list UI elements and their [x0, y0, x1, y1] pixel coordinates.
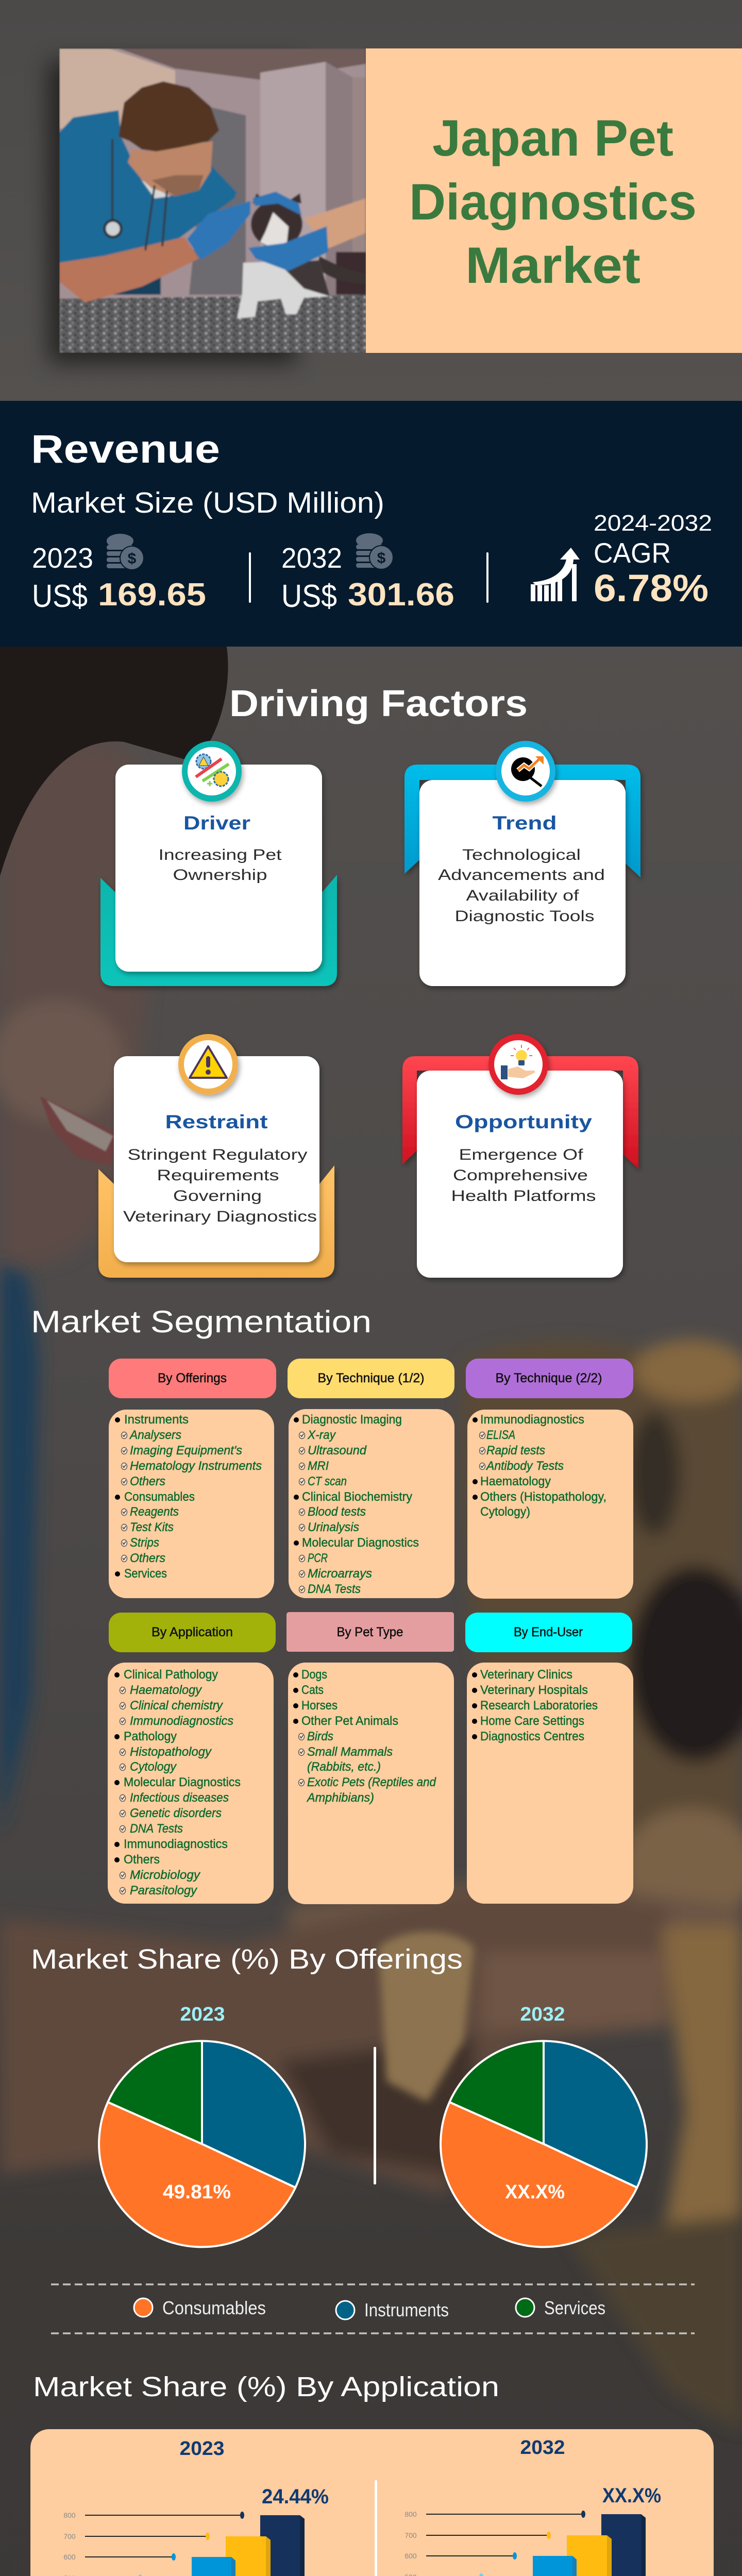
list: Infectious diseases [130, 1791, 229, 1805]
bar chart 2032 [404, 2437, 661, 2576]
2023 value: 169.65 [98, 577, 206, 613]
market size subtitle: Market Size (USD Million) [31, 486, 384, 519]
list: Immunodiagnostics [130, 1714, 233, 1728]
2032 value [281, 542, 454, 614]
icon: trend medallion [496, 741, 555, 802]
opportunity text: Comprehensive [453, 1167, 588, 1184]
list: Diagnostic Imaging [302, 1413, 402, 1427]
list [467, 1410, 633, 1599]
list: Genetic disorders [130, 1806, 222, 1820]
panel: trend [404, 741, 640, 986]
heading: market share by application: Market Share (%) By Application [33, 2371, 499, 2402]
list: Others [130, 1475, 165, 1488]
list: MRI [308, 1459, 329, 1473]
list: Immunodiagnostics [124, 1837, 228, 1851]
list: Clinical Biochemistry [302, 1490, 412, 1504]
bar chart 2023: 700 [63, 2532, 76, 2540]
header: By End-User [514, 1625, 583, 1639]
restraint text [123, 1146, 317, 1225]
list: Imaging Equipment's [130, 1444, 242, 1458]
header: By Technique (1/2) [317, 1371, 425, 1385]
opportunity text: Emergence Of [459, 1146, 583, 1163]
list: Rapid tests [486, 1444, 545, 1458]
opportunity text [451, 1146, 596, 1205]
title panel: Diagnostics [409, 173, 697, 230]
CAGR: 2024-2032 [594, 511, 712, 536]
2023 value: 2023 [32, 542, 93, 574]
divider [375, 2480, 377, 2576]
orange ribbon [98, 1165, 334, 1278]
pie chart 2023: 49.81% [163, 2181, 231, 2203]
list: Veterinary Clinics [480, 1668, 572, 1682]
list: Microbiology [130, 1868, 201, 1882]
panel: by technique 2 [466, 1359, 633, 1599]
icon: coins 2032 [356, 533, 393, 569]
pie chart 2023 [99, 2004, 305, 2247]
list: Diagnostics Centres [480, 1730, 584, 1743]
legend: offerings: Services [544, 2297, 605, 2318]
list: (Rabbits, etc.) [307, 1760, 381, 1774]
bar chart 2032: XX.X% [602, 2484, 661, 2507]
panel: driver [100, 741, 337, 986]
header [288, 1359, 454, 1398]
icon: coins 2023 [107, 534, 144, 570]
list: DNA Tests [308, 1582, 361, 1596]
panel: by technique 1 [288, 1359, 454, 1598]
header [109, 1613, 276, 1652]
list: Hematology Instruments [130, 1459, 262, 1473]
header [286, 1612, 454, 1652]
header: By Offerings [158, 1371, 227, 1385]
list: Horses [301, 1699, 338, 1713]
list [467, 1663, 633, 1904]
divider [374, 2047, 376, 2184]
bar chart 2023: 2023 [179, 2438, 225, 2460]
list: Amphibians) [306, 1791, 374, 1805]
list: Exotic Pets (Reptiles and [307, 1775, 436, 1789]
divider [486, 552, 488, 603]
list: Antibody Tests [485, 1459, 564, 1473]
opportunity text: Health Platforms [451, 1188, 596, 1205]
icon: coins 2023: $ [128, 550, 137, 567]
panel: opportunity [402, 1034, 638, 1278]
2023 value: US$ [32, 579, 88, 614]
list: Molecular Diagnostics [302, 1536, 419, 1550]
list: Cytology) [480, 1505, 530, 1519]
icon: opportunity medallion [488, 1034, 548, 1095]
icon: coins 2032: $ [377, 550, 386, 567]
heading: market segmentation: Market Segmentation [31, 1304, 372, 1339]
list: Strips [130, 1536, 159, 1550]
list: Birds [307, 1730, 333, 1743]
bar chart 2032: 700 [404, 2531, 417, 2539]
list: Others [130, 1551, 165, 1565]
bar chart 2023: 800 [63, 2511, 76, 2519]
trend title: Trend [493, 812, 556, 834]
list [288, 1663, 454, 1904]
header [109, 1359, 276, 1398]
restraint text: Veterinary Diagnostics [123, 1208, 317, 1225]
restraint text: Governing [173, 1188, 262, 1205]
list: Haematology [130, 1683, 203, 1697]
bar chart 2032: 800 [404, 2510, 417, 2518]
driver text: Ownership [173, 867, 267, 884]
opportunity title: Opportunity [455, 1111, 593, 1132]
list: Research Laboratories [480, 1699, 598, 1713]
list: X-ray [307, 1428, 336, 1442]
driver text [159, 846, 282, 884]
panel: by end-user [465, 1613, 633, 1904]
teal ribbon [100, 875, 337, 986]
list: Consumables [124, 1490, 195, 1504]
list: Others [124, 1853, 160, 1867]
icon: driver medallion [182, 741, 242, 802]
trend text: Availability of [466, 887, 579, 904]
CAGR: 6.78% [594, 567, 709, 609]
list: Services [124, 1567, 167, 1581]
panel: restraint [98, 1034, 334, 1278]
heading: driving factors: Driving Factors [229, 683, 528, 724]
list: Haematology [480, 1475, 551, 1488]
list [108, 1663, 274, 1904]
restraint text: Stringent Regulatory [128, 1146, 307, 1163]
pie chart 2032 [441, 2004, 647, 2247]
2032 value: 2032 [281, 542, 342, 574]
bar chart 2023 [63, 2438, 329, 2576]
header: By Technique (2/2) [496, 1371, 602, 1385]
list: Pathology [124, 1730, 177, 1743]
driver title: Driver [183, 812, 250, 834]
header [465, 1613, 632, 1652]
list [109, 1410, 274, 1598]
list: Blood tests [308, 1505, 366, 1519]
header: By Application [151, 1625, 233, 1639]
trend text: Advancements and [438, 867, 605, 884]
list: Clinical chemistry [130, 1699, 224, 1713]
bar chart 2032: 600 [404, 2552, 417, 2560]
pie chart 2023: 2023 [180, 2004, 225, 2025]
header photo: vet examining cat [49, 48, 366, 363]
icon: growth arrow [531, 548, 580, 601]
list: Parasitology [130, 1884, 198, 1897]
list: Urinalysis [308, 1520, 359, 1534]
list: DNA Tests [130, 1822, 183, 1836]
2032 value: 301.66 [348, 577, 454, 613]
divider [249, 552, 251, 603]
list: Veterinary Hospitals [480, 1683, 588, 1697]
header: By Pet Type [337, 1625, 403, 1639]
trend text: Diagnostic Tools [454, 908, 595, 925]
legend: offerings: Consumables [162, 2297, 266, 2318]
title panel: Japan Pet [432, 109, 673, 166]
list: Other Pet Animals [301, 1714, 398, 1728]
list: Others (Histopathology, [480, 1490, 606, 1504]
panel: by application [108, 1613, 276, 1904]
list: Reagents [130, 1505, 179, 1519]
list: Instruments [124, 1413, 189, 1427]
list: ELISA [486, 1428, 515, 1442]
2023 value [32, 542, 206, 614]
list: Immunodiagnostics [480, 1413, 584, 1427]
trend text [438, 846, 605, 925]
blue ribbon [404, 765, 640, 877]
list: Analysers [129, 1428, 181, 1442]
2032 value: US$ [281, 579, 337, 614]
header [466, 1359, 633, 1398]
list: Clinical Pathology [124, 1668, 218, 1682]
bar chart 2023: 600 [63, 2553, 76, 2561]
title panel: Market [465, 236, 640, 294]
list [289, 1409, 454, 1598]
list: Small Mammals [307, 1745, 393, 1759]
CAGR [594, 511, 712, 609]
trend text: Technological [462, 846, 581, 863]
title panel [366, 48, 742, 353]
heading: market share by offerings: Market Share (%) By Offerings [31, 1944, 463, 1975]
list: Test Kits [130, 1520, 174, 1534]
list: CT scan [308, 1475, 347, 1488]
list: Ultrasound [308, 1444, 367, 1458]
list: Home Care Settings [480, 1714, 584, 1728]
restraint text: Requirements [157, 1167, 279, 1184]
legend: offerings: Instruments [364, 2299, 449, 2320]
legend: offerings [134, 2297, 605, 2320]
list: Cats [301, 1683, 324, 1697]
list: PCR [308, 1551, 328, 1565]
icon: restraint medallion [178, 1034, 238, 1095]
pie chart 2032: 2032 [520, 2004, 565, 2025]
panel: revenue band [0, 401, 742, 647]
pie chart 2032: XX.X% [505, 2181, 565, 2203]
red ribbon [402, 1056, 638, 1168]
list: Cytology [130, 1760, 177, 1774]
list: Histopathology [130, 1745, 212, 1759]
list: Dogs [301, 1668, 327, 1682]
revenue heading: Revenue [31, 427, 220, 471]
restraint title: Restraint [165, 1111, 268, 1132]
panel: by offerings [109, 1359, 276, 1598]
bar chart 2032: 2032 [520, 2437, 565, 2459]
panel: by pet type [286, 1612, 454, 1904]
panel: application charts [30, 2429, 714, 2576]
list: Molecular Diagnostics [124, 1775, 241, 1789]
driver text: Increasing Pet [159, 846, 282, 863]
CAGR: CAGR [594, 537, 671, 569]
bar chart 2023: 24.44% [262, 2485, 329, 2508]
list: Microarrays [308, 1567, 372, 1581]
